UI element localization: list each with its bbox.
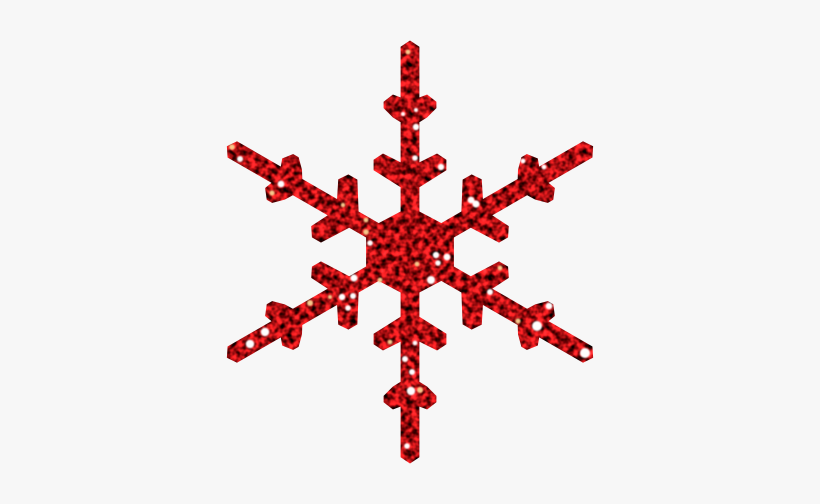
arm: upper right: [427, 115, 611, 263]
white sparkles: [237, 108, 590, 449]
snowflake body with glitter texture: [209, 41, 611, 463]
arm: lower right: [427, 241, 611, 389]
arm: bottom: [374, 292, 446, 463]
centre hexagon: [366, 207, 454, 297]
arm: top: [374, 41, 446, 212]
snowflake: [209, 41, 611, 463]
warm orange sparkles: [229, 50, 521, 393]
arm: lower left: [209, 241, 393, 389]
arm: upper left: [209, 115, 393, 263]
